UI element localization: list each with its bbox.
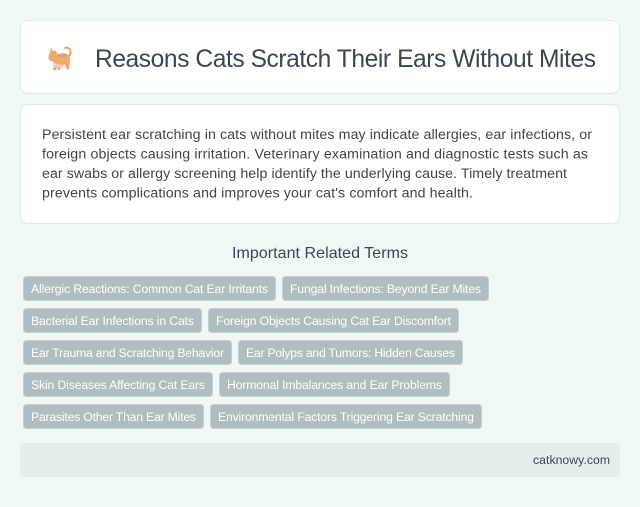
tag: fungal infections: Fungal Infections: Beyond Ear Mites <box>290 282 481 296</box>
summary text: Persistent ear scratching in cats without mites may indicate allergies, ear infections, or <box>42 127 592 143</box>
tag: foreign objects <box>208 308 458 332</box>
tag: bacterial infections <box>24 308 202 332</box>
summary text <box>42 127 592 202</box>
panel: header card <box>20 20 620 94</box>
tag: ear trauma: Ear Trauma and Scratching Behavior <box>31 346 224 360</box>
summary text: prevents complications and improves your cat's comfort and health. <box>42 186 473 202</box>
tag: hormonal imbalances <box>220 372 450 396</box>
tag: bacterial infections: Bacterial Ear Infections in Cats <box>31 314 194 328</box>
panel: summary card <box>20 104 620 224</box>
footer <box>20 443 620 477</box>
tag: environmental factors <box>210 404 482 428</box>
summary text: foreign objects causing irritation. Veterinary examination and diagnostic tests such as <box>42 146 588 162</box>
panel: related term tags <box>24 276 488 428</box>
tag: polyps and tumors <box>238 340 462 364</box>
tag: allergic reactions <box>24 276 276 300</box>
footer site name: catknowy.com <box>533 453 610 467</box>
heading: important related terms: Important Related Terms <box>232 245 408 262</box>
tag: hormonal imbalances: Hormonal Imbalances and Ear Problems <box>227 378 442 392</box>
tag: ear trauma <box>24 340 232 364</box>
tag: allergic reactions: Allergic Reactions: Common Cat Ear Irritants <box>31 282 268 296</box>
summary text: ear swabs or allergy screening help identify the underlying cause. Timely treatment <box>42 166 567 182</box>
tag: foreign objects: Foreign Objects Causing Cat Ear Discomfort <box>216 314 452 328</box>
title: Reasons Cats Scratch Their Ears Without Mites <box>95 46 596 73</box>
tag: parasites: Parasites Other Than Ear Mites <box>31 410 196 424</box>
icon: cat <box>48 48 71 70</box>
tag: fungal infections <box>282 276 488 300</box>
tag: environmental factors: Environmental Factors Triggering Ear Scratching <box>218 410 474 424</box>
tag: skin diseases: Skin Diseases Affecting Cat Ears <box>31 378 205 392</box>
tag: skin diseases <box>24 372 212 396</box>
tag: parasites <box>24 404 204 428</box>
tag: polyps and tumors: Ear Polyps and Tumors: Hidden Causes <box>246 346 455 360</box>
